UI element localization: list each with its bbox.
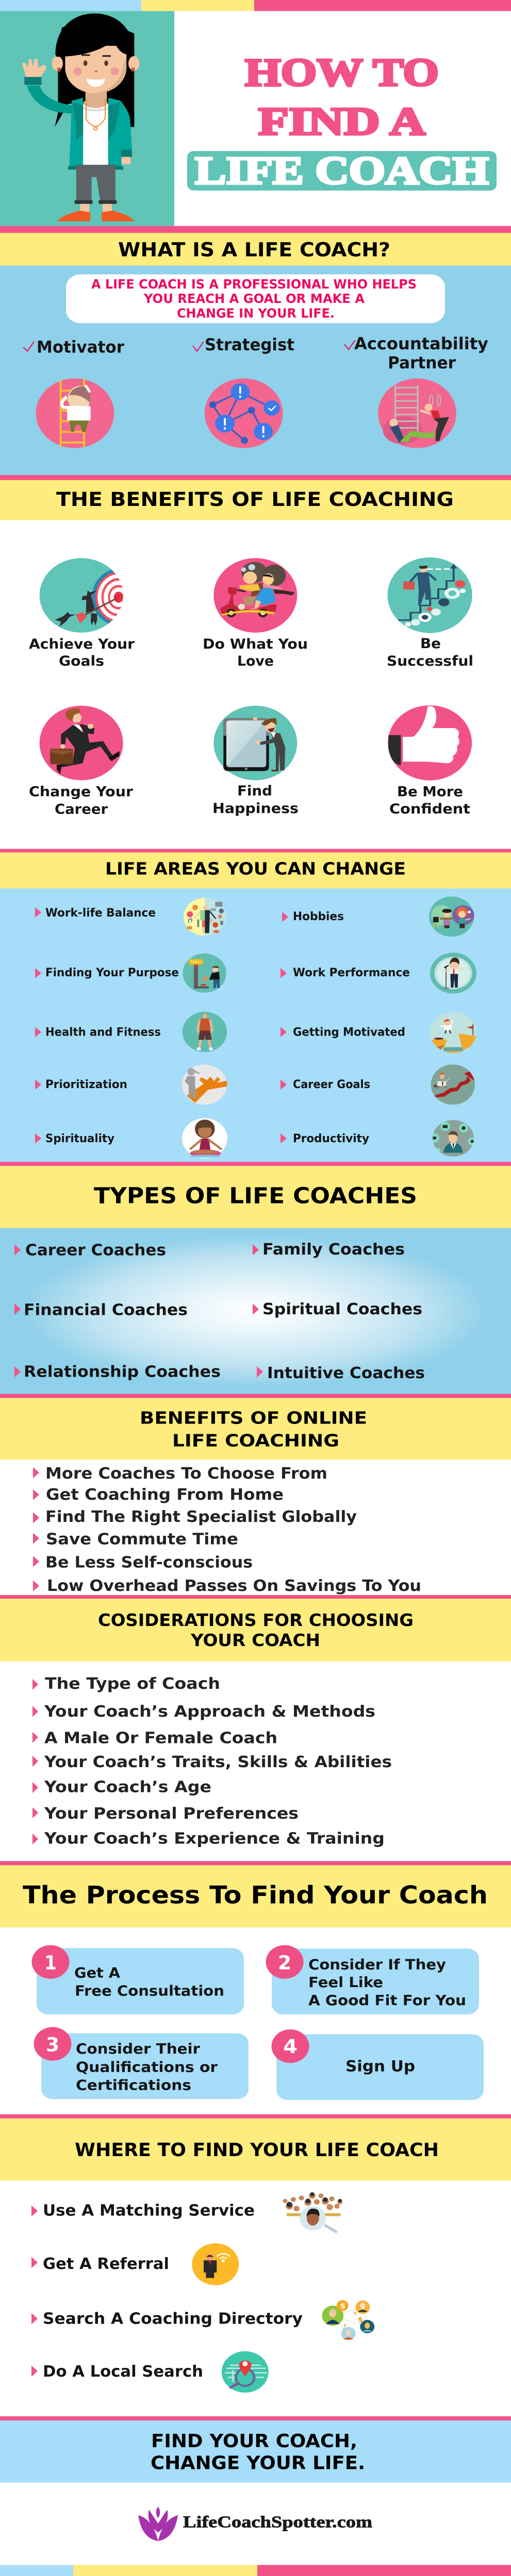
divider band (0, 849, 511, 853)
divider band (0, 1861, 511, 1865)
label: do what you love: Love (237, 653, 274, 669)
panel: closing call to action (0, 2420, 511, 2483)
divider band (0, 1162, 511, 1166)
item: spiritual coaches: Spiritual Coaches (262, 1300, 422, 1318)
label: change your career: Career (55, 801, 108, 817)
divider band (0, 475, 511, 480)
bottom colour stripe (0, 2565, 511, 2576)
label: be more confident (389, 784, 470, 817)
item: hobbies: Hobbies (293, 909, 344, 923)
icon: career goals (431, 1064, 475, 1105)
item: family coaches: Family Coaches (262, 1240, 405, 1258)
item: career goals: Career Goals (293, 1077, 370, 1091)
label: be more confident: Confident (389, 801, 470, 817)
hero panel (0, 11, 511, 226)
role: strategist: Strategist (205, 335, 294, 354)
icon: directory network: $ (358, 2316, 363, 2324)
item: financial coaches: Financial Coaches (24, 1300, 188, 1319)
step 2: 2 (278, 1952, 291, 1974)
label: change your career: Change Your (29, 784, 133, 800)
step 1: 1 (44, 1952, 57, 1974)
step 2: Consider If They (308, 1956, 446, 1973)
label: find happiness: Find (237, 783, 272, 799)
heading: life areas: LIFE AREAS YOU CAN CHANGE (105, 859, 406, 879)
icon: achieve your goals target (39, 558, 123, 633)
icon: purple lotus logo (138, 2506, 178, 2541)
icon: be more confident thumbs up (388, 705, 472, 781)
item: work-life balance: Work-life Balance (45, 906, 156, 920)
panel: benefits of online life coaching (0, 1398, 511, 1595)
label: be successful (387, 636, 473, 669)
item: local search: Do A Local Search (43, 2362, 203, 2381)
illustration: waving woman coach (22, 13, 139, 221)
item: relationship coaches: Relationship Coaches (24, 1362, 221, 1381)
heading: process: The Process To Find Your Coach (23, 1880, 488, 1909)
role: motivator: Motivator (37, 337, 124, 357)
label: achieve your goals (29, 636, 135, 669)
step 2: Feel Like (308, 1974, 383, 1991)
label: achieve your goals: Goals (59, 653, 104, 669)
step 4: 4 (283, 2036, 298, 2058)
heading: where: WHERE TO FIND YOUR LIFE COACH (75, 2139, 439, 2161)
definition callout (66, 275, 445, 323)
icon: directory network: $ (343, 2323, 346, 2328)
definition callout: CHANGE IN YOUR LIFE. (177, 306, 335, 321)
heading: considerations: YOUR COACH (190, 1631, 320, 1651)
item: more coaches: More Coaches To Choose From (45, 1464, 327, 1482)
item: work performance: Work Performance (293, 965, 410, 979)
icon: crowd with magnifier (283, 2192, 342, 2232)
item: health and fitness: Health and Fitness (45, 1025, 161, 1039)
label: find happiness (212, 783, 299, 817)
icon: work-life balance (184, 897, 226, 936)
item: intuitive coaches: Intuitive Coaches (267, 1364, 425, 1382)
icon: find happiness tablet (213, 706, 297, 780)
role: accountability partner (344, 334, 488, 372)
step 3: Qualifications or (76, 2059, 218, 2075)
panel: life areas you can change (0, 853, 511, 1162)
icon: work performance (430, 953, 476, 993)
logo wordmark: LifeCoachSpotter.com (183, 2513, 372, 2531)
step 4: Sign Up (345, 2058, 415, 2075)
icon: prioritization (182, 1064, 227, 1105)
role: accountability partner: Partner (388, 353, 456, 372)
item: less self-conscious: Be Less Self-conscious (45, 1553, 253, 1571)
heading: online coaching: LIFE COACHING (172, 1431, 339, 1451)
panel: closing call to action: CHANGE YOUR LIFE. (151, 2452, 365, 2473)
item: approach and methods: Your Coach’s Approach & Methods (44, 1702, 375, 1720)
divider band (0, 2114, 511, 2119)
divider band (0, 2416, 511, 2420)
item: career coaches: Career Coaches (25, 1241, 166, 1259)
icon: do what you love scooter couple (213, 558, 297, 633)
title: life coach badge: LIFE COACH (195, 149, 489, 192)
icon: be successful stairs (387, 557, 472, 633)
icon: directory network: $ (354, 2311, 357, 2315)
step 3: Certifications (76, 2077, 191, 2093)
item: prioritization: Prioritization (45, 1077, 127, 1091)
panel: considerations for choosing your coach (0, 1599, 511, 1861)
icon: accountability partner workout (378, 379, 456, 448)
divider band (0, 1394, 511, 1398)
panel: benefits of life coaching (0, 480, 511, 849)
label: achieve your goals: Achieve Your (29, 636, 135, 652)
item: finding your purpose: Finding Your Purpose (45, 965, 179, 979)
panel: the process to find your coach (0, 1865, 511, 2114)
label: change your career (29, 784, 133, 817)
panel: logo footer (0, 2483, 511, 2565)
item: experience and training: Your Coach’s Experience & Training (44, 1829, 385, 1848)
panel: closing call to action: FIND YOUR COACH, (151, 2430, 357, 2451)
title: how to find a: HOW TO (245, 51, 439, 94)
item: coaching directory: Search A Coaching Directory (43, 2309, 303, 2328)
icon: productivity (433, 1120, 474, 1157)
icon: getting motivated (430, 1012, 477, 1053)
item: spirituality: Spirituality (45, 1131, 114, 1145)
step 1: Get A (74, 1964, 120, 1981)
item: coaching from home: Get Coaching From Home (46, 1485, 284, 1504)
step 3: Consider Their (76, 2040, 201, 2057)
icon: finding your purpose (183, 954, 226, 993)
item: personal preferences: Your Personal Preferences (44, 1804, 299, 1823)
icon: strategist network (205, 379, 283, 448)
label: be successful: Be (420, 636, 441, 652)
item: coach age: Your Coach’s Age (44, 1777, 211, 1796)
icon: directory network (322, 2300, 374, 2340)
panel: where to find your life coach (0, 2119, 511, 2416)
heading: online coaching: BENEFITS OF ONLINE (140, 1408, 367, 1428)
item: right specialist: Find The Right Specialist Globally (45, 1507, 357, 1526)
icon: directory network: $ (340, 2302, 345, 2310)
label: be more confident: Be More (397, 784, 463, 800)
step 1 (32, 1945, 244, 2014)
step 2: A Good Fit For You (308, 1992, 466, 2009)
item: save commute: Save Commute Time (46, 1530, 238, 1548)
item: type of coach: The Type of Coach (45, 1674, 220, 1693)
icon: referral businessman (192, 2243, 239, 2285)
step 4 (271, 2029, 484, 2100)
step 3 (34, 2027, 249, 2099)
label: be successful: Successful (387, 653, 473, 669)
heading: considerations: COSIDERATIONS FOR CHOOSING (98, 1611, 414, 1630)
title: how to find a: FIND A (258, 100, 425, 143)
icon: health and fitness (183, 1012, 227, 1052)
definition callout: A LIFE COACH IS A PROFESSIONAL WHO HELPS (91, 277, 417, 292)
item: male or female: A Male Or Female Coach (44, 1728, 277, 1747)
heading: what is a life coach: WHAT IS A LIFE COACH? (118, 239, 390, 261)
definition callout: YOU REACH A GOAL OR MAKE A (143, 291, 365, 307)
icon: local search map pin (222, 2351, 269, 2393)
icon: finding your purpose: Purpose (191, 960, 201, 964)
item: getting motivated: Getting Motivated (293, 1025, 405, 1039)
step 3: 3 (46, 2033, 59, 2056)
title: how to find a (245, 51, 439, 143)
item: traits and skills: Your Coach’s Traits, Skills & Abilities (44, 1753, 392, 1771)
step 2 (266, 1945, 479, 2014)
top colour stripe (0, 0, 511, 11)
icon: spirituality (182, 1118, 227, 1158)
heading: online coaching (140, 1408, 367, 1451)
divider band (0, 1595, 511, 1599)
label: do what you love: Do What You (203, 636, 308, 652)
heading: considerations (98, 1611, 414, 1651)
heading: types: TYPES OF LIFE COACHES (94, 1183, 417, 1209)
divider band (0, 226, 511, 233)
item: referral: Get A Referral (43, 2255, 169, 2273)
item: matching service: Use A Matching Service (43, 2201, 255, 2219)
label: do what you love (203, 636, 308, 669)
step 1: Free Consultation (75, 1982, 224, 1999)
icon: hobbies (429, 896, 474, 937)
icon: change your career running businessman (40, 706, 123, 780)
icon: motivator climbing ladder (36, 379, 114, 448)
item: productivity: Productivity (293, 1131, 369, 1145)
item: low overhead: Low Overhead Passes On Savings To You (47, 1577, 421, 1595)
panel: what is a life coach (0, 233, 511, 475)
panel: types of life coaches (0, 1166, 511, 1394)
label: find happiness: Happiness (212, 800, 299, 817)
role: accountability partner: Accountability (354, 334, 488, 354)
heading: benefits: THE BENEFITS OF LIFE COACHING (56, 488, 454, 511)
